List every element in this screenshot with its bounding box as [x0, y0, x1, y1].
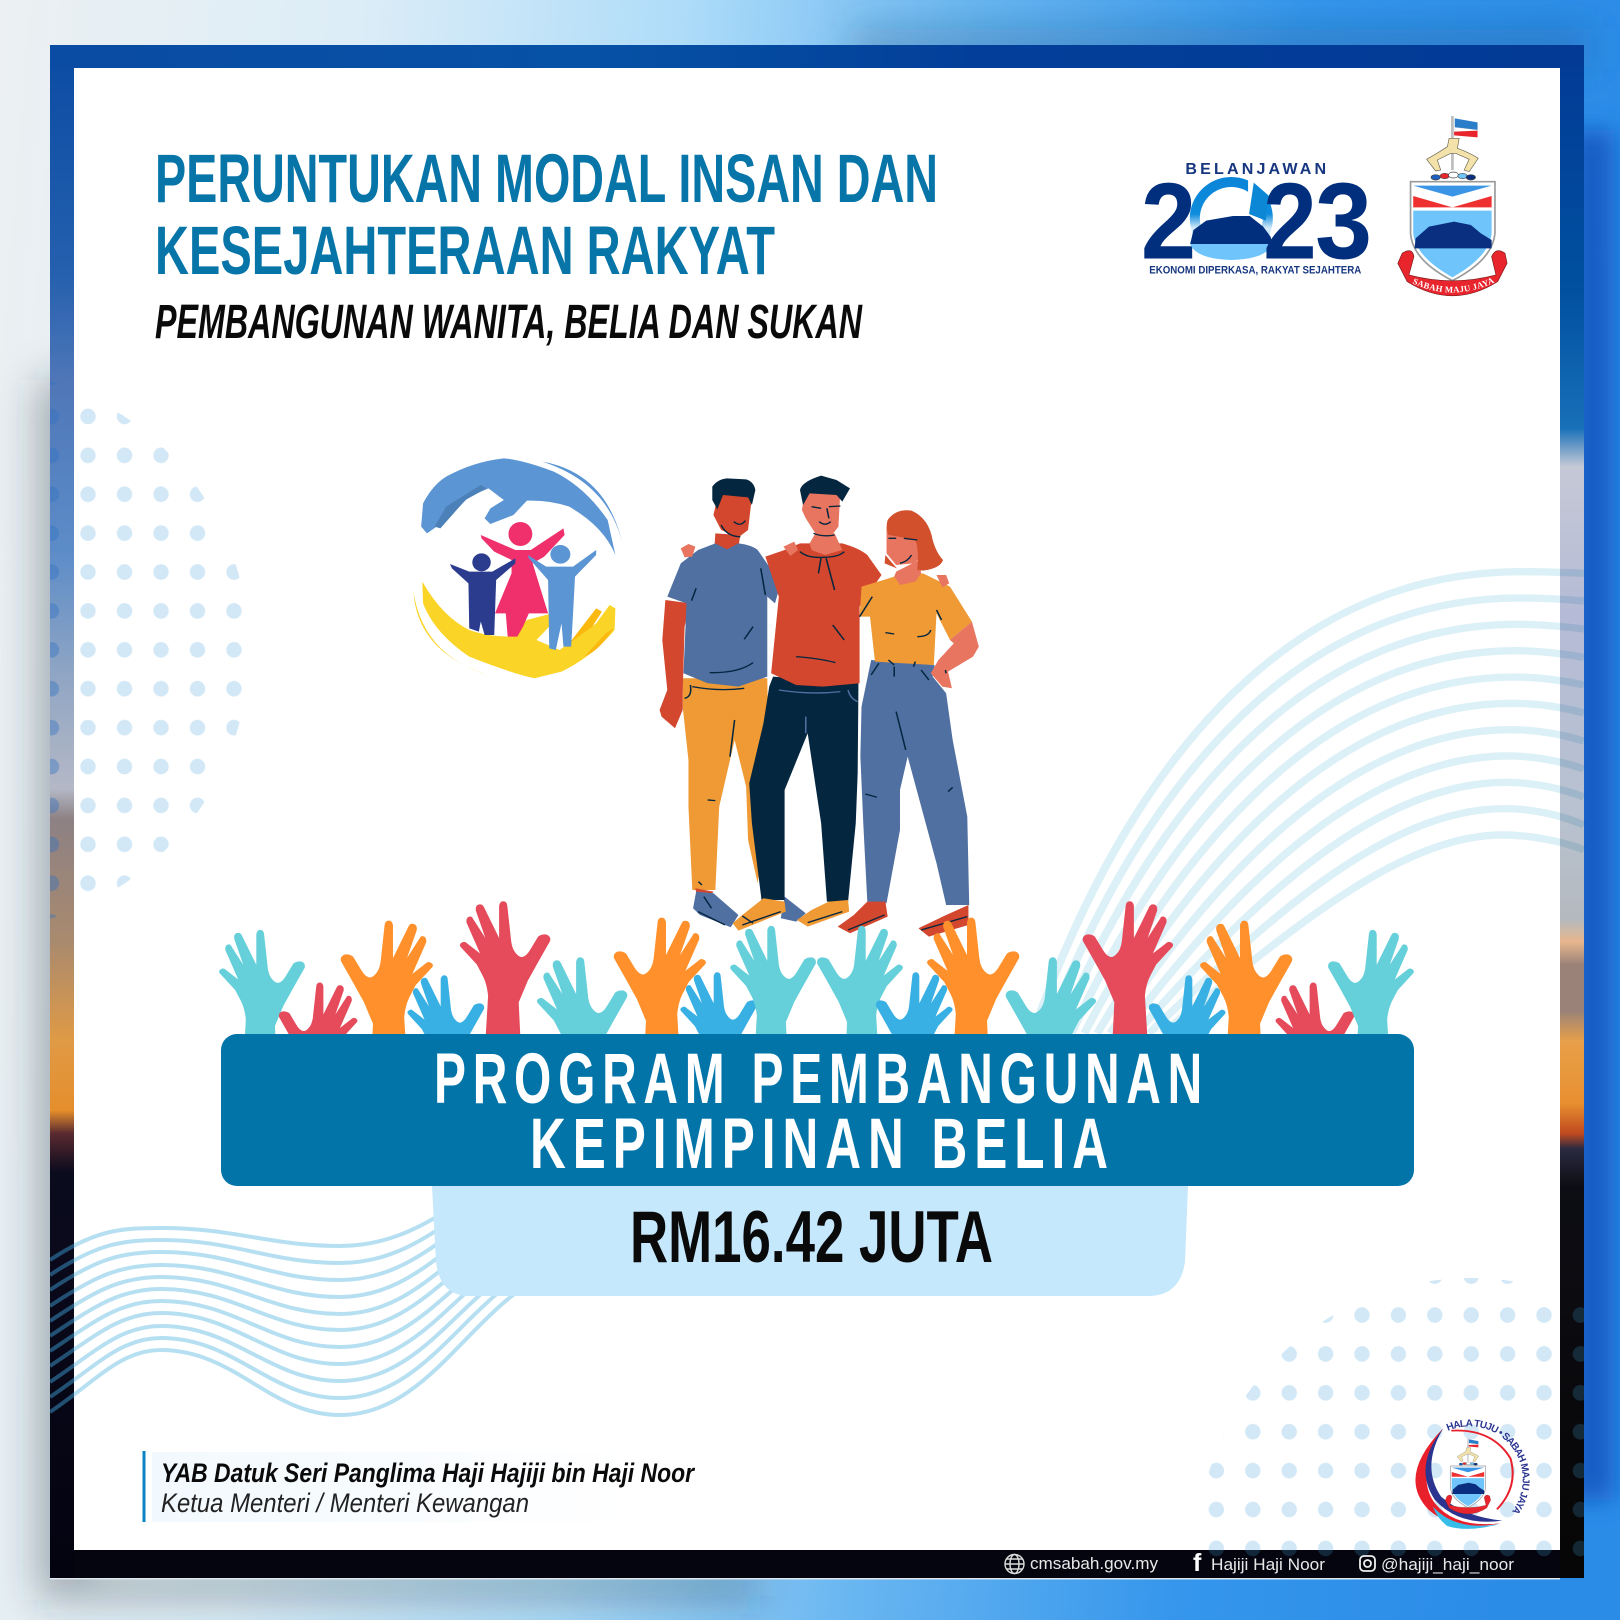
icon: facebook: f: [1193, 1549, 1202, 1577]
icon: instagram: [1360, 1556, 1375, 1571]
program banner: [221, 1034, 1414, 1186]
program banner: KEPIMPINAN BELIA: [530, 1105, 1115, 1184]
title: PERUNTUKAN MODAL INSAN DAN: [155, 140, 938, 217]
speaker attribution: YAB Datuk Seri Panglima Haji Hajiji bin Haji Noor: [161, 1458, 695, 1488]
title: [155, 140, 938, 289]
icon: family in caring hands: [413, 458, 623, 678]
subtitle: PEMBANGUNAN WANITA, BELIA DAN SUKAN: [155, 296, 863, 349]
speaker attribution: Ketua Menteri / Menteri Kewangan: [161, 1488, 529, 1518]
speaker attribution: [142, 1451, 695, 1522]
title: KESEJAHTERAAN RAKYAT: [155, 212, 775, 289]
logo: Belanjawan 2023: BELANJAWAN: [1185, 160, 1326, 178]
icon: globe: [1005, 1554, 1024, 1574]
logo: Sabah coat of arms: SABAH MAJU JAYA: [1412, 278, 1494, 293]
raised hands row: [220, 902, 1413, 1100]
logo: Belanjawan 2023: EKONOMI DIPERKASA, RAKYAT SEJAHTERA: [1149, 264, 1361, 276]
facebook name: Hajiji Haji Noor: [1211, 1555, 1325, 1574]
man in the middle: [733, 476, 882, 931]
dot pattern: bottom right: [1197, 1278, 1584, 1578]
dot pattern: left: [50, 381, 249, 919]
logo: Belanjawan 2023: [1141, 160, 1372, 282]
instagram handle: @hajiji_haji_noor: [1381, 1555, 1514, 1574]
program banner: PROGRAM PEMBANGUNAN: [434, 1040, 1209, 1119]
man on the left: [660, 478, 781, 927]
logo: Belanjawan 2023: 2: [1263, 161, 1317, 282]
amount panel: [432, 1186, 1188, 1296]
logo: Hala Tuju Sabah Maju Jaya: HALA TUJU • SABAH MAJU JAYA: [1446, 1420, 1530, 1514]
decorative waves: bottom left: [50, 1216, 515, 1417]
amount panel: RM16.42 JUTA: [630, 1197, 993, 1278]
woman on the right: [838, 510, 979, 937]
decorative curves: top right: [1033, 572, 1584, 1033]
logo: Hala Tuju Sabah Maju Jaya: [1415, 1420, 1530, 1529]
footer contact bar: [1005, 1549, 1514, 1577]
logo: Belanjawan 2023: 2: [1141, 161, 1196, 282]
website: cmsabah.gov.my: [1030, 1554, 1159, 1573]
logo: Belanjawan 2023: 3: [1315, 161, 1372, 282]
illustration: three young people: [660, 476, 979, 937]
logo: Sabah coat of arms: [1398, 116, 1508, 296]
